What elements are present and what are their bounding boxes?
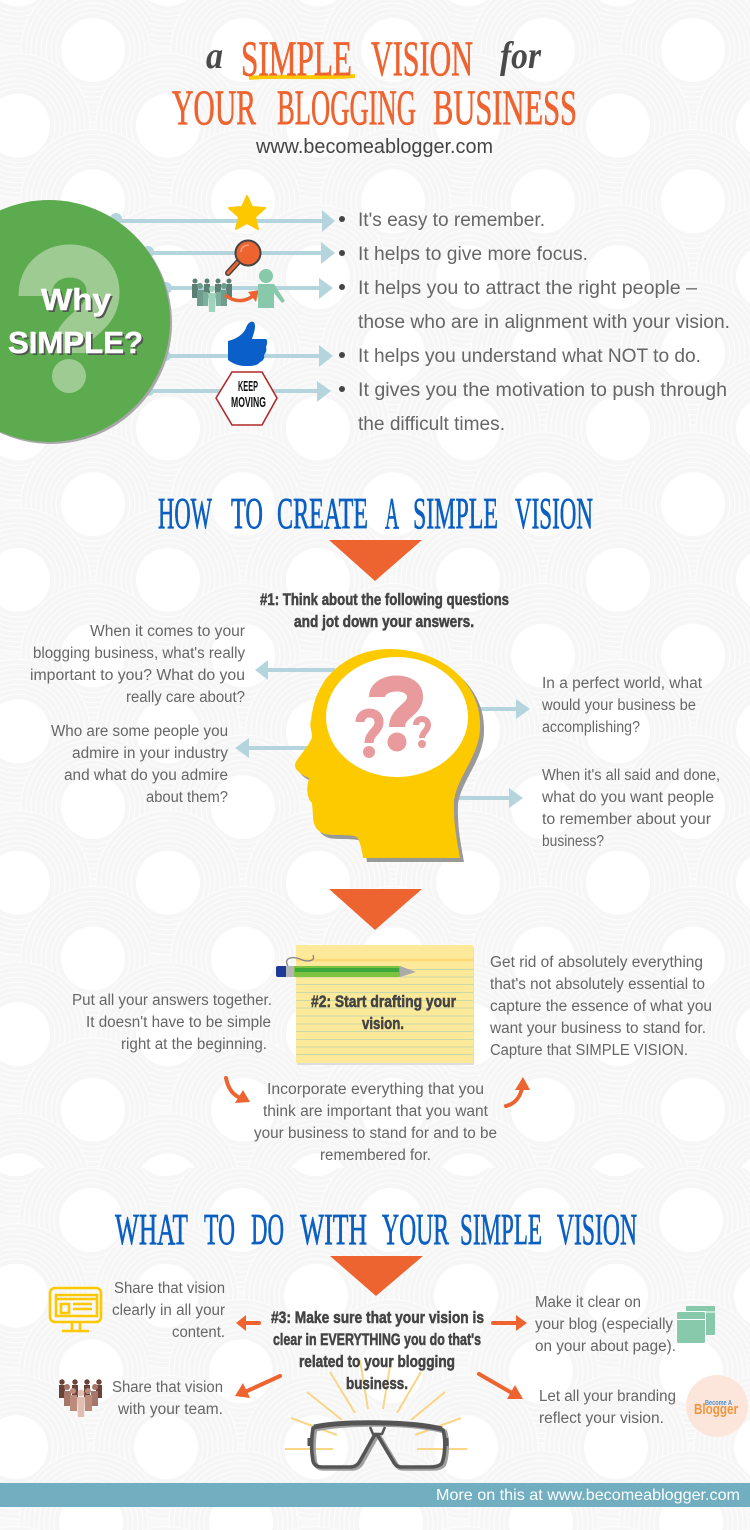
panel: step 3 — [50, 1280, 748, 1468]
question right two — [541, 767, 720, 850]
curved arrow right — [506, 1077, 530, 1106]
step 2 heading — [311, 992, 456, 1033]
why simple label: SIMPLE? — [10, 327, 145, 362]
icon: keep moving hexagon: KEEP — [238, 378, 258, 395]
text: branding — [539, 1388, 676, 1427]
step 2 left text — [72, 992, 272, 1053]
panel: step 2 — [72, 945, 712, 1164]
panel: step 1 — [30, 590, 720, 862]
why simple label: SIMPLE? — [8, 325, 143, 360]
triangle one — [329, 540, 422, 581]
heading: how to create: TO — [231, 489, 263, 538]
step 1 heading: #1: Think about the following questions — [260, 590, 509, 609]
text: branding: reflect your vision. — [539, 1410, 664, 1427]
title line two: BUSINESS — [433, 79, 577, 135]
heading: how to create: CREATE — [277, 489, 368, 538]
question right two: what do you want people — [541, 789, 714, 806]
step 2 bottom text: remembered for. — [320, 1147, 431, 1164]
icon: glasses with rays — [285, 1360, 467, 1468]
question left one: blogging business, what's really — [33, 645, 245, 662]
logo: become a blogger: Blogger — [694, 1401, 738, 1418]
icon: thumbs up — [228, 322, 267, 366]
step 2 right text: Get rid of absolutely everything — [490, 954, 703, 971]
step 2 bottom text: think are important that you want — [263, 1103, 489, 1120]
heading: how to create: SIMPLE — [413, 489, 498, 538]
text: about page: Make it clear on — [535, 1294, 641, 1311]
question left one: When it comes to your — [90, 623, 245, 640]
text: share in content: content. — [172, 1324, 225, 1341]
why simple label: Why — [43, 284, 114, 319]
question left two — [51, 723, 228, 806]
icon: star — [229, 196, 265, 229]
step 2 right text: that's not absolutely essential to — [490, 976, 705, 993]
question marks — [360, 683, 428, 758]
step 3 heading: business. — [346, 1374, 408, 1393]
step 1 heading: and jot down your answers. — [294, 612, 474, 631]
bullet list: the difficult times. — [358, 414, 505, 435]
question left two: about them? — [146, 789, 228, 806]
question right two: to remember about your — [542, 811, 711, 828]
title line two: YOUR — [172, 79, 256, 135]
icon: head — [295, 649, 484, 862]
heading: what to do: SIMPLE — [460, 1205, 542, 1254]
title — [172, 30, 577, 158]
step 3 heading: related to your blogging — [299, 1352, 455, 1371]
heading: what to do: VISION — [557, 1205, 637, 1254]
step 2 right text: Capture that SIMPLE VISION. — [490, 1042, 688, 1059]
text: about page — [535, 1294, 676, 1355]
panel: why simple — [0, 196, 730, 444]
question right one: would your business be — [541, 697, 696, 714]
text: branding: Let all your branding — [539, 1388, 676, 1405]
step 1 arrows — [235, 660, 530, 808]
question right one — [541, 675, 703, 736]
step 2 bottom text: Incorporate everything that you — [267, 1081, 484, 1098]
question right two: business? — [542, 833, 604, 850]
title line one: SIMPLE — [241, 30, 352, 86]
icon: keep moving hexagon: MOVING — [231, 394, 266, 411]
title underline — [249, 76, 355, 78]
title line one: a — [206, 35, 223, 77]
triangle two — [329, 889, 422, 930]
logo: become a blogger — [686, 1375, 748, 1437]
question left one: really care about? — [126, 689, 245, 706]
heading: how to create: A — [385, 489, 399, 538]
heading: what to do: WHAT — [115, 1205, 188, 1254]
step 3 heading — [271, 1308, 484, 1393]
bullet list: It helps you understand what NOT to do. — [358, 346, 701, 367]
heading: what to do: TO — [204, 1205, 235, 1254]
rays — [285, 1360, 467, 1449]
curved arrow — [225, 295, 254, 301]
big question mark — [35, 261, 103, 393]
curved arrow left — [226, 1078, 250, 1103]
question right one: In a perfect world, what — [542, 675, 703, 692]
icon: pencil — [276, 955, 416, 977]
bullet list — [339, 210, 730, 435]
text: share in content: clearly in all your — [112, 1302, 225, 1319]
title line two — [172, 79, 577, 135]
question right two: When it's all said and done, — [542, 767, 720, 784]
question left one: important to you? What do you — [30, 667, 245, 684]
icon: monitor — [50, 1288, 101, 1331]
bullet list: those who are in alignment with your vision. — [358, 312, 730, 333]
question right one: accomplishing? — [542, 719, 640, 736]
text: about page: your blog (especially — [535, 1316, 673, 1333]
person — [259, 269, 273, 283]
title line two: BLOGGING — [277, 79, 416, 135]
logo: become a blogger: Become A — [705, 1398, 732, 1407]
heading: what to do: DO — [251, 1205, 284, 1254]
heading: what to do: WITH — [300, 1205, 367, 1254]
heading: how to create — [158, 489, 593, 538]
icon: crowd to person — [192, 269, 285, 312]
step 3 heading: #3: Make sure that your vision is — [271, 1308, 484, 1327]
icon: browser windows — [676, 1306, 715, 1344]
step 2 left text: right at the beginning. — [121, 1036, 267, 1053]
frames — [309, 1423, 447, 1468]
bullet list: It helps you to attract the right people – — [358, 278, 697, 299]
question left two: Who are some people you — [51, 723, 228, 740]
footer band: More on this at www.becomeablogger.com — [436, 1487, 740, 1504]
title line one — [206, 30, 542, 86]
step 3 heading: clear in EVERYTHING you do that's — [273, 1330, 481, 1349]
step 2 left text: It doesn't have to be simple — [86, 1014, 271, 1031]
step 2 bottom text: your business to stand for and to be — [254, 1125, 497, 1142]
heading: how to create: VISION — [515, 489, 593, 538]
step 2 right text: capture the essence of what you — [490, 998, 712, 1015]
why simple label — [8, 282, 145, 362]
text: share in content: Share that vision — [114, 1280, 225, 1297]
bullet list: It helps to give more focus. — [358, 244, 588, 265]
connector arrows — [110, 210, 335, 402]
bullet list: It gives you the motivation to push through — [358, 380, 727, 401]
step 2 right text: want your business to stand for. — [489, 1020, 706, 1037]
step 2 heading: vision. — [362, 1014, 404, 1033]
triangle three — [330, 1256, 423, 1296]
heading: what to do — [115, 1205, 637, 1254]
icon: team — [59, 1379, 102, 1417]
website: www.becomeablogger.com — [255, 136, 493, 158]
step 2 left text: Put all your answers together. — [72, 992, 272, 1009]
question left two: admire in your industry — [72, 745, 228, 762]
text: share in content — [112, 1280, 225, 1341]
text: about page: on your about page). — [535, 1338, 676, 1355]
bullet list: It's easy to remember. — [358, 210, 545, 231]
step 2 bottom text — [254, 1081, 497, 1164]
step 2 heading: #2: Start drafting your — [311, 992, 456, 1011]
step 1 heading — [260, 590, 509, 631]
step 2 right text — [489, 954, 712, 1059]
why simple label: Why — [41, 282, 112, 317]
green circle — [0, 200, 172, 444]
heading: what to do: YOUR — [382, 1205, 449, 1254]
text: share with team: with your team. — [117, 1401, 223, 1418]
text: share with team: Share that vision — [112, 1379, 223, 1396]
title line one: for — [500, 35, 542, 77]
notepad — [296, 945, 474, 1065]
icon: magnifying glass — [228, 240, 260, 273]
question left one — [30, 623, 245, 706]
footer band — [0, 1483, 750, 1507]
heading: how to create: HOW — [158, 489, 212, 538]
icon: keep moving hexagon — [216, 372, 277, 425]
question left two: and what do you admire — [64, 767, 228, 784]
text: share with team — [112, 1379, 223, 1418]
title line one: VISION — [371, 30, 473, 86]
step 3 arrows — [235, 1315, 527, 1399]
